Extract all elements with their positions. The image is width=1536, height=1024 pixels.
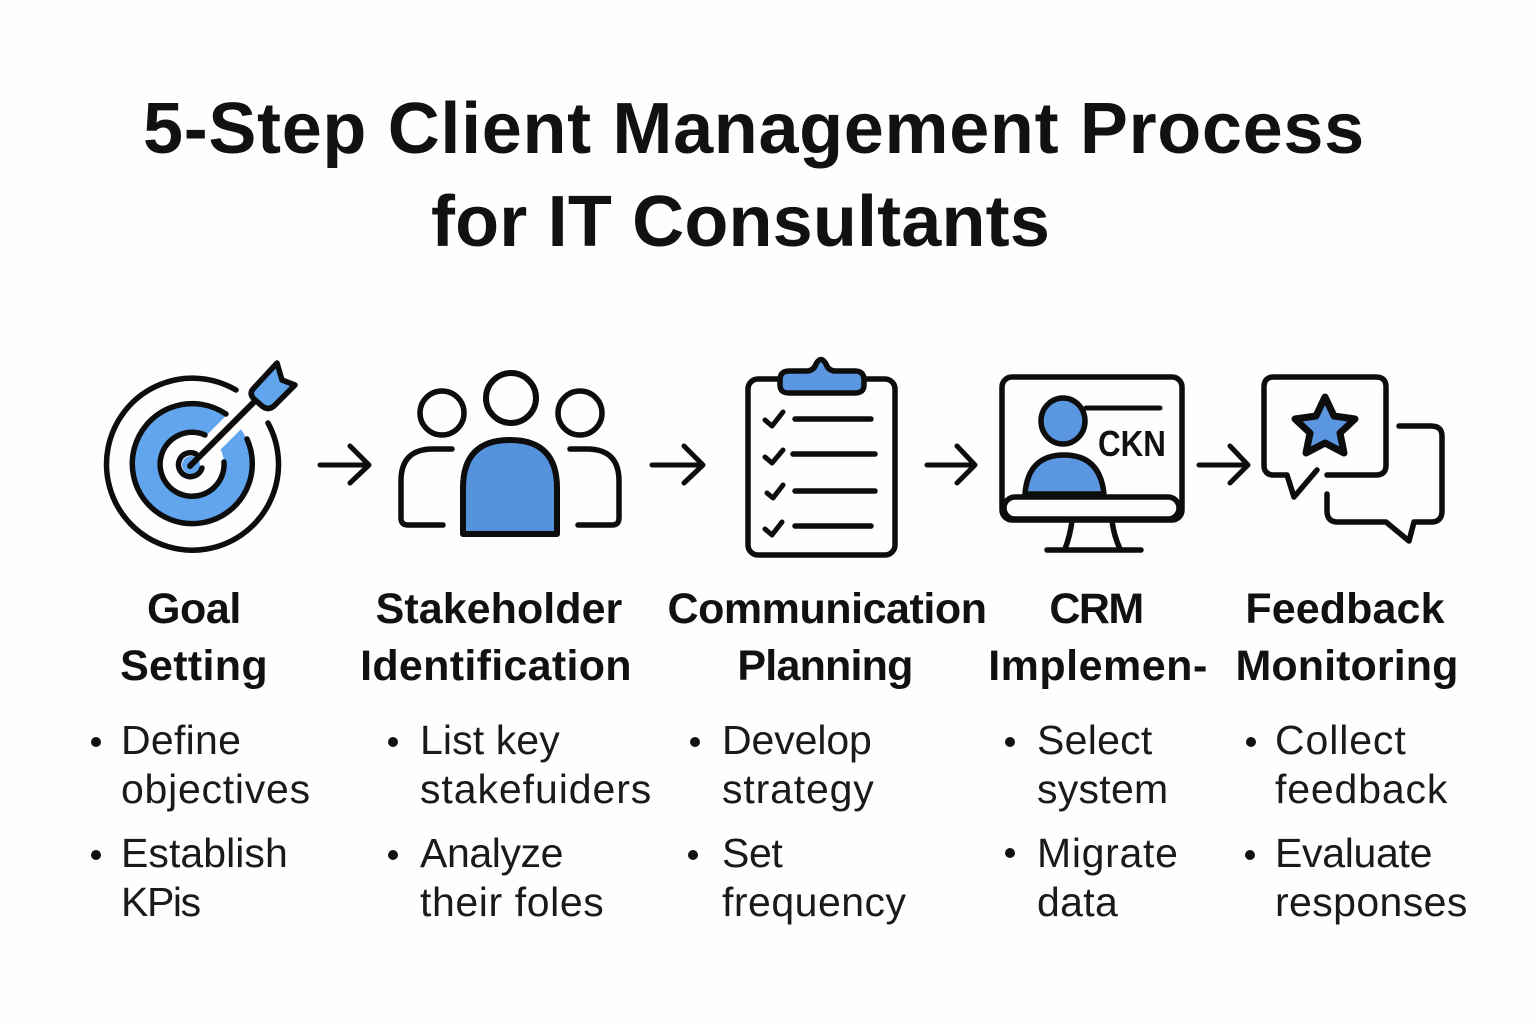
heading: Goal Setting: Setting — [120, 642, 268, 690]
list: feedback monitoring: feedback — [1275, 766, 1448, 812]
list: CRM implementation — [1005, 717, 1179, 925]
list: goal setting: KPis — [121, 879, 200, 925]
heading: Stakeholder Identification: Stakeholder — [376, 585, 622, 633]
list: feedback monitoring: Collect — [1275, 717, 1407, 763]
list: stakeholder identification: stakefuiders — [420, 766, 652, 812]
heading: CRM Implemen-: CRM — [1049, 585, 1143, 633]
arrow 2 — [652, 446, 703, 483]
title: for IT Consultants — [431, 182, 1050, 262]
list: feedback monitoring: Evaluate — [1275, 830, 1432, 876]
heading: Stakeholder Identification: Identification — [360, 642, 632, 690]
list: feedback monitoring — [1245, 717, 1468, 925]
list: stakeholder identification: List key — [420, 717, 560, 763]
icon: stakeholders — [401, 373, 619, 534]
list: stakeholder identification: their foles — [420, 879, 604, 925]
list: goal setting: objectives — [121, 766, 311, 812]
list: CRM implementation: system — [1037, 766, 1168, 812]
heading: Feedback Monitoring: Feedback — [1245, 585, 1445, 633]
arrow 3 — [927, 446, 975, 483]
list: CRM implementation: data — [1037, 879, 1118, 925]
list: goal setting — [91, 717, 311, 925]
icon: clipboard checklist — [748, 360, 895, 555]
icon: CRM monitor — [1002, 377, 1182, 550]
list: communication planning: frequency — [722, 879, 907, 925]
list: feedback monitoring: responses — [1275, 879, 1468, 925]
heading: Stakeholder Identification — [360, 585, 632, 690]
list: goal setting: Define — [121, 717, 241, 763]
list: communication planning: Develop — [722, 717, 872, 763]
list: CRM implementation: Migrate — [1037, 830, 1179, 876]
list: stakeholder identification — [388, 717, 652, 925]
list: goal setting: Establish — [121, 830, 288, 876]
list: communication planning — [688, 717, 907, 925]
heading: Goal Setting: Goal — [147, 585, 241, 633]
list: communication planning: strategy — [722, 766, 875, 812]
arrow 1 — [320, 446, 369, 483]
heading: Communication Planning — [667, 585, 987, 690]
heading: CRM Implemen- — [988, 585, 1208, 690]
heading: CRM Implemen-: Implemen- — [988, 642, 1208, 690]
heading: Communication Planning: Planning — [737, 642, 913, 690]
list: communication planning: Set — [722, 830, 782, 876]
heading: Communication Planning: Communication — [667, 585, 987, 633]
icon: feedback chat bubbles — [1264, 377, 1442, 541]
list: CRM implementation: Select — [1037, 717, 1153, 763]
icon: target with arrow — [107, 363, 295, 550]
title — [143, 89, 1365, 262]
title: 5-Step Client Management Process — [143, 89, 1365, 169]
heading: Feedback Monitoring: Monitoring — [1235, 642, 1459, 690]
icon text: CKN: CKN — [1098, 423, 1166, 464]
arrow 4 — [1199, 446, 1248, 483]
heading: Goal Setting — [120, 585, 268, 690]
heading: Feedback Monitoring — [1235, 585, 1459, 690]
list: stakeholder identification: Analyze — [420, 830, 563, 876]
